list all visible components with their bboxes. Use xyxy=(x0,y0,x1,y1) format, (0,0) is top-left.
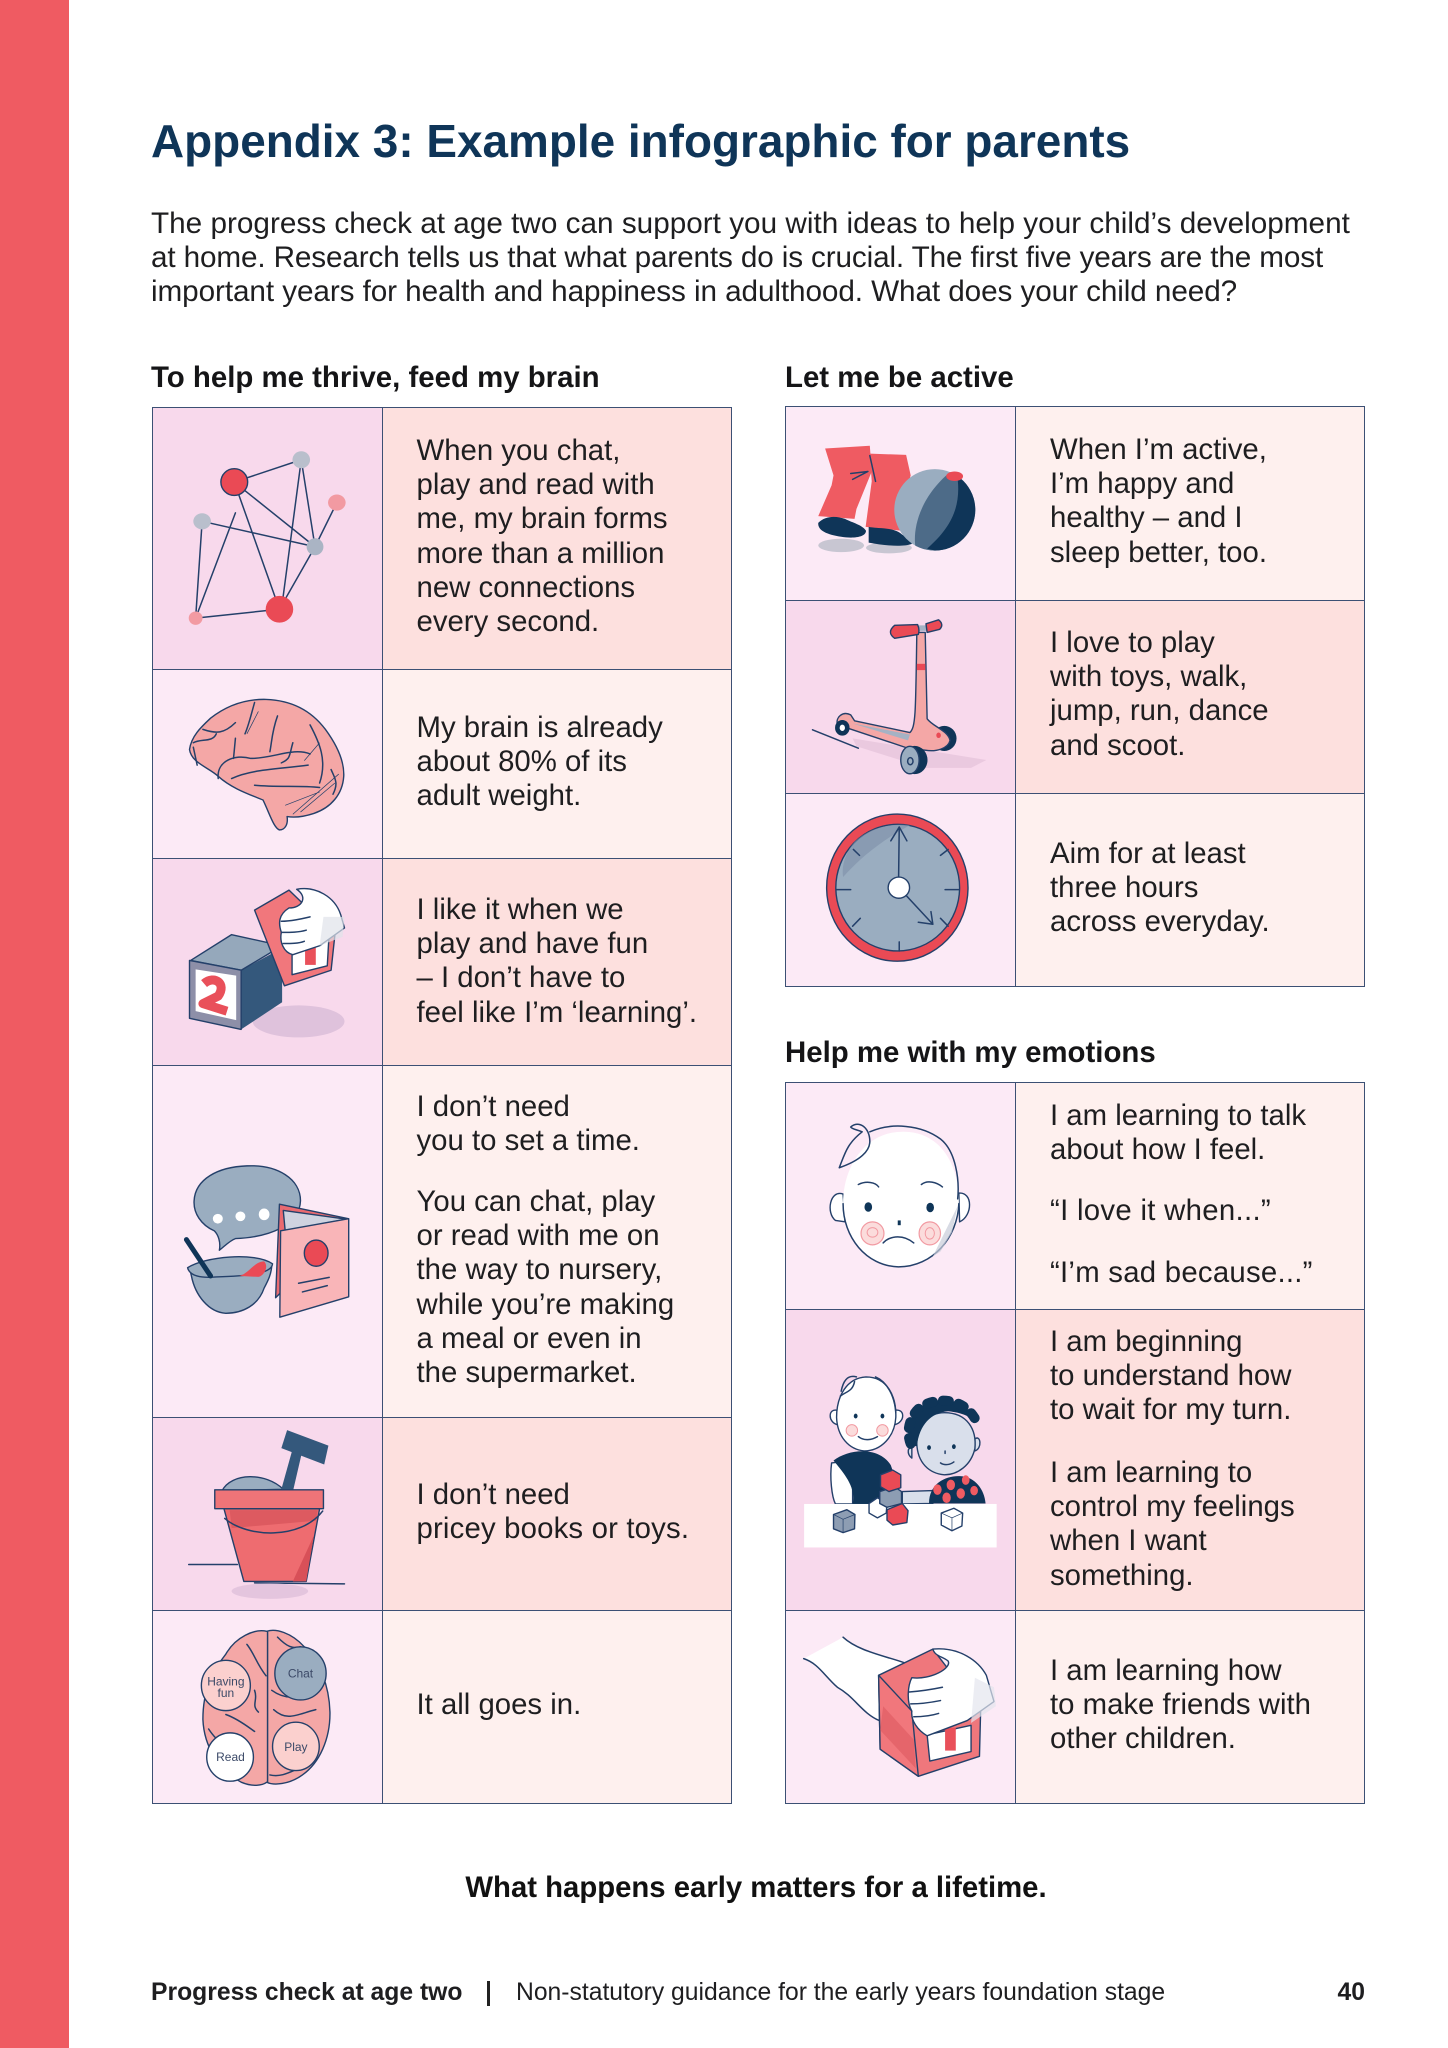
row 2 background icon cell xyxy=(152,669,383,859)
text: play and have fun xyxy=(416,893,697,1029)
footer subtitle: Non-statutory guidance for the early years foundation stage xyxy=(516,1978,1165,2006)
text: make friends: to make friends with xyxy=(1050,1688,1311,1721)
icon: bucket and spade xyxy=(188,1430,346,1599)
text: talk about feelings xyxy=(1050,1099,1306,1166)
text: active: sleep better, too. xyxy=(1050,536,1267,569)
panel: active and emotions tables xyxy=(785,406,1365,1804)
text: wait for my turn: to wait for my turn. xyxy=(1050,1393,1291,1426)
active row 1 icon cell xyxy=(785,406,1016,601)
active row 3 icon cell xyxy=(785,793,1016,987)
red side bar xyxy=(0,0,69,2048)
emotions row 3 icon cell xyxy=(785,1610,1016,1804)
icon: legs and ball xyxy=(818,446,976,554)
icon: brain top view with labels xyxy=(200,1630,331,1786)
text: love to play: and scoot. xyxy=(1050,729,1185,762)
text: make friends: I am learning how xyxy=(1050,1654,1282,1687)
text: active: When I’m active, xyxy=(1050,433,1267,466)
row 3 background icon cell xyxy=(152,858,383,1066)
heading: feed my brain: To help me thrive, feed my brain xyxy=(151,360,600,394)
icon: brain top view with labels: Having xyxy=(207,1674,245,1688)
text: brain connections: more than a million xyxy=(416,537,664,570)
footer title: Progress check at age two xyxy=(151,1978,462,2006)
icon: sad face xyxy=(829,1124,970,1268)
icon: speech bubble, bowl and book xyxy=(184,1165,350,1318)
active row 1 text cell xyxy=(1015,406,1365,601)
text: control feelings: something. xyxy=(1050,1559,1194,1592)
text: active xyxy=(1050,433,1267,569)
row 4 background icon cell xyxy=(152,1065,383,1418)
icon: neural network xyxy=(188,451,346,625)
text: control feelings: I am learning to xyxy=(1050,1456,1252,1489)
text: love to play xyxy=(1049,626,1269,762)
text: no need to set a time: I don’t need xyxy=(416,1090,570,1123)
active row 3 text cell xyxy=(1015,793,1365,987)
text: pricey books: pricey books or toys. xyxy=(416,1512,689,1545)
text: three hours: three hours xyxy=(1050,871,1198,904)
active row 2 icon cell xyxy=(785,600,1016,794)
text: love to play: jump, run, dance xyxy=(1050,694,1269,727)
text: wait for my turn: I am beginning xyxy=(1050,1325,1242,1358)
text: active: I’m happy and xyxy=(1050,467,1234,500)
intro paragraph xyxy=(151,206,1350,308)
intro paragraph: important years for health and happiness in adulthood. What does your child need? xyxy=(151,275,1237,308)
row 1 background icon cell xyxy=(152,407,383,670)
text: love to play: I love to play xyxy=(1050,626,1215,659)
text: pricey books: I don’t need xyxy=(416,1478,570,1511)
text: make friends: other children. xyxy=(1050,1722,1236,1755)
text: chat on the way: You can chat, play xyxy=(416,1185,655,1218)
text: three hours xyxy=(1050,837,1270,938)
icon: scooter xyxy=(812,619,986,774)
text: brain weight xyxy=(416,711,663,812)
text: chat on the way: while you’re making xyxy=(416,1288,674,1321)
emotions row 3 text cell xyxy=(1015,1610,1365,1804)
row 6 background icon cell xyxy=(152,1610,383,1804)
text: play and have fun: – I don’t have to xyxy=(416,961,625,994)
text: talk about feelings: I am learning to talk xyxy=(1050,1099,1306,1132)
emotions row 2 text cell xyxy=(1015,1309,1365,1611)
icon: brain top view with labels: Play xyxy=(284,1740,308,1754)
emotions row 1 text cell xyxy=(1015,1082,1365,1310)
page number: 40 xyxy=(1338,1978,1365,2006)
text: three hours: Aim for at least xyxy=(1050,837,1246,870)
footer divider xyxy=(487,1980,490,2006)
text: control feelings xyxy=(1050,1456,1295,1592)
icon: brain top view with labels: fun xyxy=(218,1686,234,1700)
icon: number blocks and hand xyxy=(188,888,346,1038)
text: play and have fun: I like it when we xyxy=(416,893,624,926)
text: control feelings: when I want xyxy=(1050,1524,1207,1557)
active row 2 text cell xyxy=(1015,600,1365,794)
text: active: healthy – and I xyxy=(1050,501,1243,534)
footer xyxy=(151,1978,1365,2006)
icon: clock xyxy=(826,813,969,962)
text: brain connections xyxy=(416,434,668,638)
text: brain weight: about 80% of its xyxy=(416,745,627,778)
intro paragraph: at home. Research tells us that what parents do is crucial. The first five years are the most xyxy=(151,241,1323,274)
heading: emotions: Help me with my emotions xyxy=(785,1036,1156,1069)
text: chat on the way: or read with me on xyxy=(416,1219,660,1252)
text: love to play: with toys, walk, xyxy=(1050,660,1247,693)
text: chat on the way: the way to nursery, xyxy=(416,1253,662,1286)
text: brain connections: When you chat, xyxy=(416,434,620,467)
text: play and have fun: feel like I’m ‘learning’. xyxy=(416,996,697,1029)
text: chat on the way: the supermarket. xyxy=(416,1356,637,1389)
row 5 background text cell xyxy=(382,1417,732,1611)
text: brain weight: My brain is already xyxy=(416,711,663,744)
text: all goes in: It all goes in. xyxy=(416,1688,581,1721)
text: chat on the way: a meal or even in xyxy=(416,1322,642,1355)
row 4 background text cell xyxy=(382,1065,732,1418)
icon: brain side view xyxy=(188,698,344,831)
text: I'm sad because: “I’m sad because...” xyxy=(1050,1256,1313,1289)
icon: brain top view with labels: Read xyxy=(216,1750,245,1764)
icon: two hands holding block xyxy=(802,1636,996,1777)
row 5 background icon cell xyxy=(152,1417,383,1611)
intro paragraph: The progress check at age two can support you with ideas to help your child’s development xyxy=(151,206,1350,240)
closing statement: What happens early matters for a lifetime. xyxy=(465,1871,1047,1904)
text: brain connections: new connections xyxy=(416,571,635,604)
emotions row 1 icon cell xyxy=(785,1082,1016,1310)
text: no need to set a time xyxy=(416,1090,640,1157)
row 1 background text cell xyxy=(382,407,732,670)
icon: two children with blocks xyxy=(804,1376,997,1548)
text: brain connections: play and read with xyxy=(416,468,655,501)
title: Appendix 3: Example infographic for parents xyxy=(151,115,1130,167)
text: wait for my turn xyxy=(1050,1325,1292,1426)
text: make friends xyxy=(1050,1654,1311,1755)
text: no need to set a time: you to set a time. xyxy=(416,1124,640,1157)
row 2 background text cell xyxy=(382,669,732,859)
text: brain connections: me, my brain forms xyxy=(416,502,668,535)
icon: brain top view with labels: Chat xyxy=(288,1666,314,1680)
text: brain connections: every second. xyxy=(416,605,599,638)
text: control feelings: control my feelings xyxy=(1050,1490,1295,1523)
row 3 background text cell xyxy=(382,858,732,1066)
text: chat on the way xyxy=(416,1185,674,1389)
text: play and have fun: play and have fun xyxy=(416,927,648,960)
text: talk about feelings: about how I feel. xyxy=(1050,1133,1265,1166)
text: brain weight: adult weight. xyxy=(416,779,581,812)
row 6 background text cell xyxy=(382,1610,732,1804)
panel: feed my brain table xyxy=(152,407,732,1804)
heading: let me be active: Let me be active xyxy=(785,360,1014,394)
text: wait for my turn: to understand how xyxy=(1050,1359,1291,1392)
text: pricey books xyxy=(416,1478,689,1545)
text: three hours: across everyday. xyxy=(1050,905,1270,938)
text: I love it when: “I love it when...” xyxy=(1050,1194,1271,1227)
emotions row 2 icon cell xyxy=(785,1309,1016,1611)
